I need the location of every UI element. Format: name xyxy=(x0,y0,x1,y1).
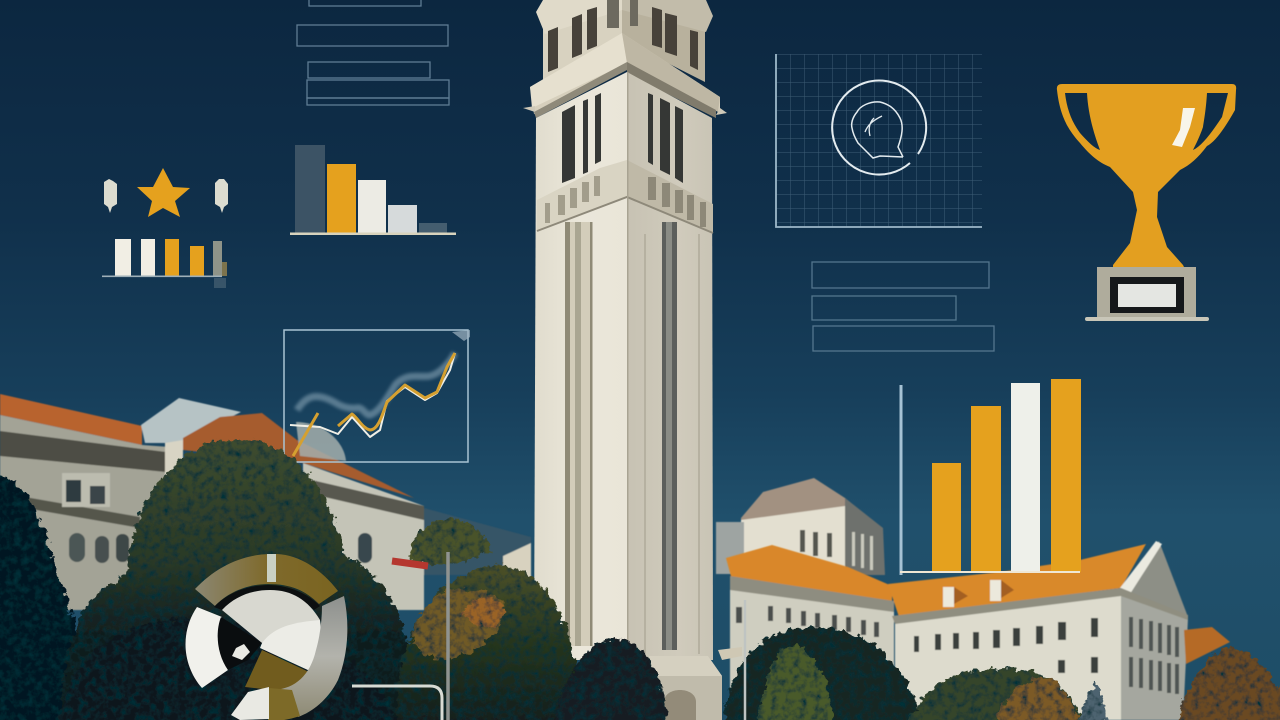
small bars xyxy=(102,239,227,288)
icon: right lantern xyxy=(215,179,228,213)
building: right hall xyxy=(726,541,1230,720)
balustrade band xyxy=(537,160,713,233)
bar chart: small star rating chart xyxy=(102,168,228,288)
building: centre rear block xyxy=(716,478,885,575)
pie: brown wedge xyxy=(245,650,309,692)
building: left hall xyxy=(0,394,531,610)
bar chart: rising bars over the roof xyxy=(900,379,1081,575)
upper windows xyxy=(562,93,683,183)
grid panel with head icon xyxy=(776,54,982,227)
tower vertical ornament xyxy=(565,72,700,662)
tower belfry xyxy=(523,0,727,118)
tower xyxy=(523,0,727,720)
donut chart xyxy=(186,554,347,720)
pie: top wedge xyxy=(222,590,320,643)
icon: left lantern xyxy=(104,179,117,213)
icon: head in circle xyxy=(832,81,926,175)
ring: top segment xyxy=(195,554,338,606)
pie: black wedge xyxy=(218,617,262,670)
ring: bottom white piece xyxy=(231,687,269,720)
ring: left white segment xyxy=(186,607,228,688)
pie: right wedge xyxy=(260,620,321,671)
tower shaft xyxy=(534,72,627,660)
ring: right grey segment xyxy=(275,596,347,717)
outlined bars: right of tower xyxy=(812,262,994,351)
tower base xyxy=(640,656,722,720)
icon: gold trophy xyxy=(1057,84,1236,321)
trees xyxy=(0,438,1280,720)
bar chart: descending bars xyxy=(290,145,456,235)
street lamp and pole xyxy=(352,552,745,720)
trophy base xyxy=(1085,267,1209,321)
outlined bars: top left xyxy=(297,0,449,105)
line chart panel: rising trend xyxy=(284,330,470,462)
ring: bottom brown piece xyxy=(268,688,300,720)
icon: star xyxy=(137,168,190,217)
